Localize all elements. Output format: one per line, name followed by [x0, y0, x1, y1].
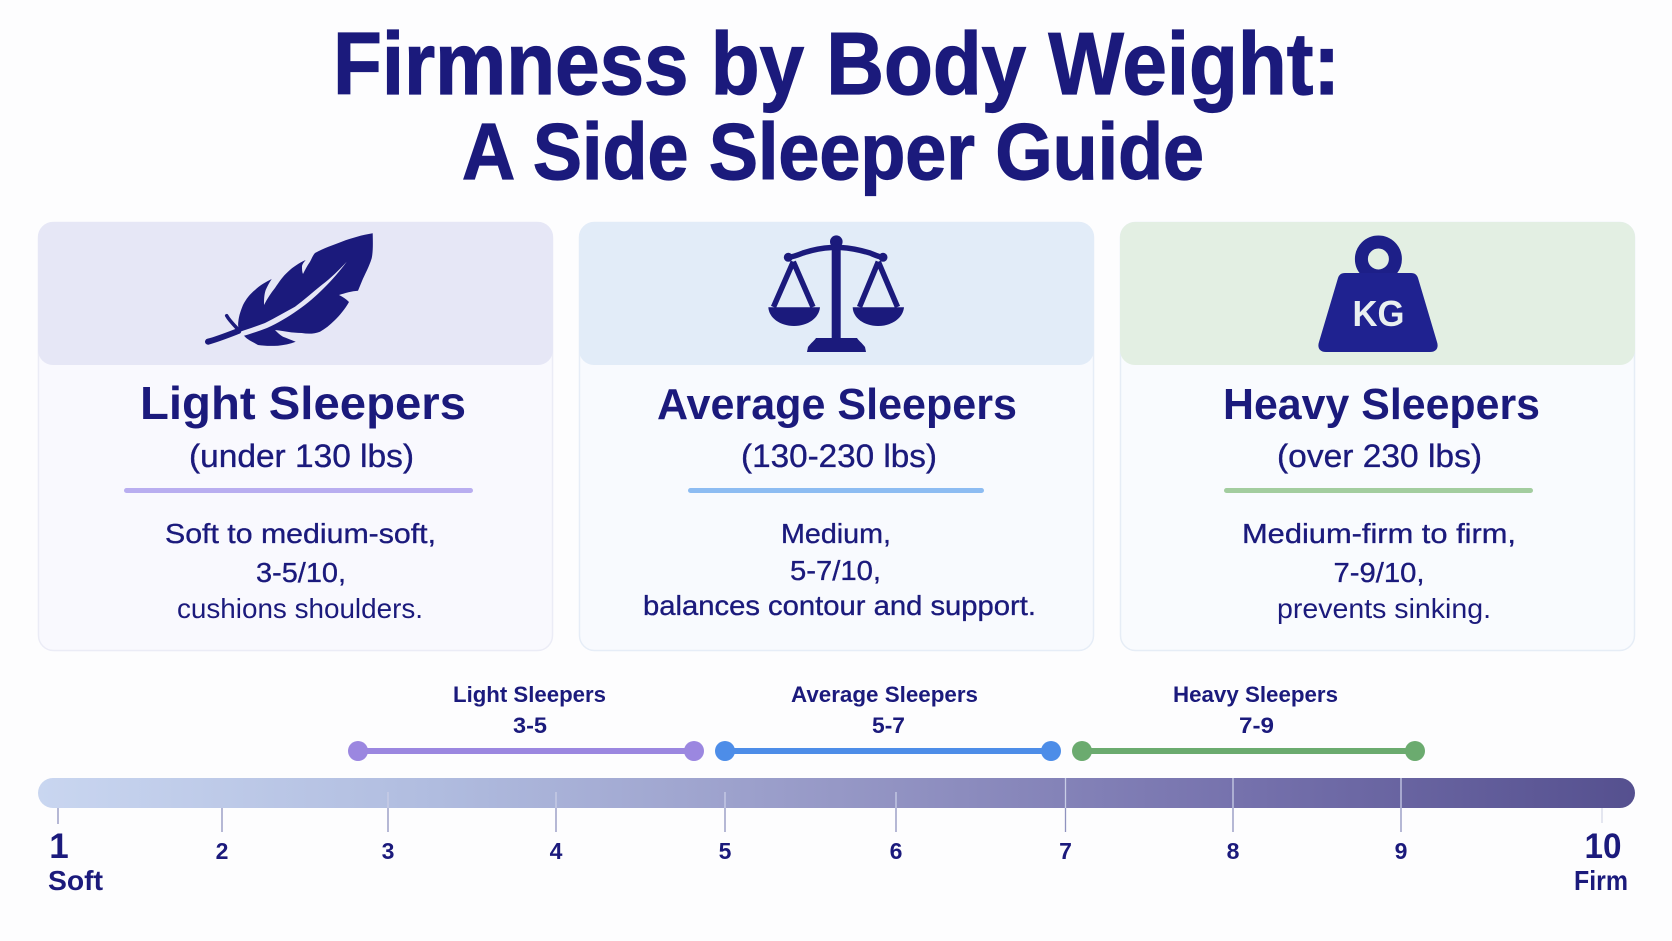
- range marker: light sleepers 3-5: Light Sleepers: [453, 682, 606, 707]
- panel: heavy sleepers: [1120, 222, 1635, 650]
- description: light sleepers: 3-5/10,: [256, 557, 346, 588]
- firmness scale bar: [38, 778, 1635, 832]
- scale labels: 6: [890, 838, 902, 864]
- scale labels: 9: [1395, 838, 1407, 864]
- range marker: heavy sleepers 7-9: 7-9: [1239, 713, 1274, 738]
- range marker: heavy sleepers 7-9: [1072, 682, 1425, 761]
- icon: kg weight: [1318, 242, 1438, 352]
- description: heavy sleepers: prevents sinking.: [1277, 593, 1491, 624]
- heading: average sleepers: Average Sleepers: [657, 380, 1017, 429]
- description: average sleepers: 5-7/10,: [790, 555, 881, 586]
- icon: kg weight: KG: [1352, 293, 1404, 334]
- description: average sleepers: [643, 518, 1036, 621]
- description: average sleepers: Medium,: [781, 518, 891, 549]
- title: Firmness by Body Weight:: [333, 14, 1340, 113]
- icon: feather: [208, 233, 373, 346]
- scale labels: 3: [382, 838, 394, 864]
- scale labels: 4: [550, 838, 563, 864]
- panel: average sleepers: [579, 222, 1094, 650]
- title: [333, 14, 1340, 196]
- description: light sleepers: Soft to medium-soft,: [165, 518, 436, 549]
- range marker: heavy sleepers 7-9: Heavy Sleepers: [1173, 682, 1338, 707]
- description: light sleepers: [165, 518, 436, 624]
- range marker: light sleepers 3-5: [348, 682, 704, 761]
- description: heavy sleepers: [1242, 518, 1516, 624]
- heading: heavy sleepers: Heavy Sleepers: [1223, 380, 1540, 429]
- title: A Side Sleeper Guide: [462, 107, 1204, 196]
- scale labels: 2: [216, 838, 228, 864]
- scale labels: 10: [1584, 827, 1622, 866]
- range marker: light sleepers 3-5: 3-5: [513, 713, 547, 738]
- scale labels: 5: [719, 838, 732, 864]
- weight range: 130-230 lbs: (130-230 lbs): [741, 438, 937, 474]
- scale labels: Firm: [1574, 865, 1628, 896]
- heading: light sleepers: Light Sleepers: [140, 377, 466, 429]
- description: light sleepers: cushions shoulders.: [177, 593, 423, 624]
- range marker: average sleepers 5-7: 5-7: [872, 713, 905, 738]
- description: heavy sleepers: Medium-firm to firm,: [1242, 518, 1516, 549]
- range marker: average sleepers 5-7: [715, 682, 1061, 761]
- icon: balance scale: [768, 235, 904, 352]
- scale labels: Soft: [48, 865, 103, 896]
- scale labels: 1: [49, 827, 69, 866]
- scale labels: [48, 827, 1628, 896]
- description: average sleepers: balances contour and support.: [643, 590, 1036, 621]
- weight range: under 130 lbs: (under 130 lbs): [189, 438, 414, 474]
- panel: light sleepers: [38, 222, 553, 650]
- weight range: over 230 lbs: (over 230 lbs): [1277, 438, 1482, 474]
- scale labels: 7: [1059, 838, 1072, 864]
- scale labels: 8: [1227, 838, 1240, 864]
- description: heavy sleepers: 7-9/10,: [1334, 557, 1424, 588]
- range marker: average sleepers 5-7: Average Sleepers: [791, 682, 978, 707]
